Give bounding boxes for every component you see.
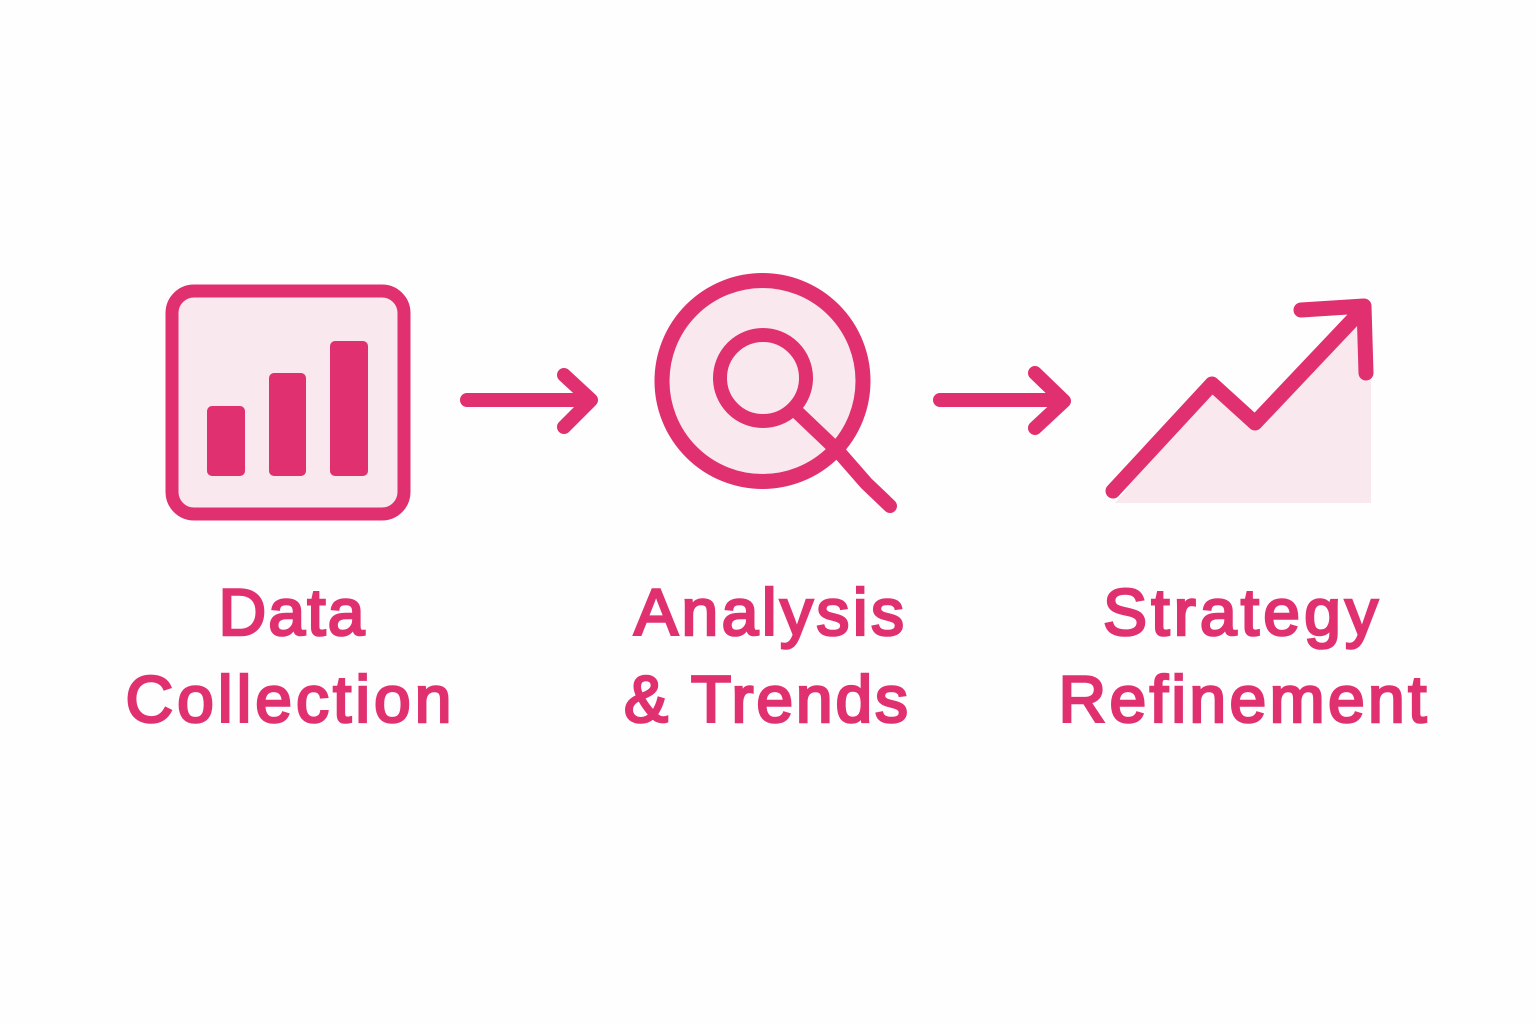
label: strategy refinement: Refinement	[1058, 662, 1426, 736]
label: analysis and trends: & Trends	[624, 662, 908, 736]
label: strategy refinement	[1058, 575, 1426, 736]
label: strategy refinement: Strategy	[1103, 575, 1378, 649]
arrow: data to analysis	[467, 375, 591, 427]
label: data collection: Collection	[126, 662, 452, 736]
icon: rising trend chart	[1113, 306, 1371, 503]
label: analysis and trends	[624, 575, 908, 736]
label: data collection	[126, 575, 452, 736]
icon: magnifying glass in circle	[662, 280, 890, 506]
arrow: analysis to strategy	[940, 373, 1064, 428]
label: data collection: Data	[218, 575, 365, 649]
icon: bar chart in rounded square	[172, 291, 404, 514]
label: analysis and trends: Analysis	[634, 575, 904, 649]
